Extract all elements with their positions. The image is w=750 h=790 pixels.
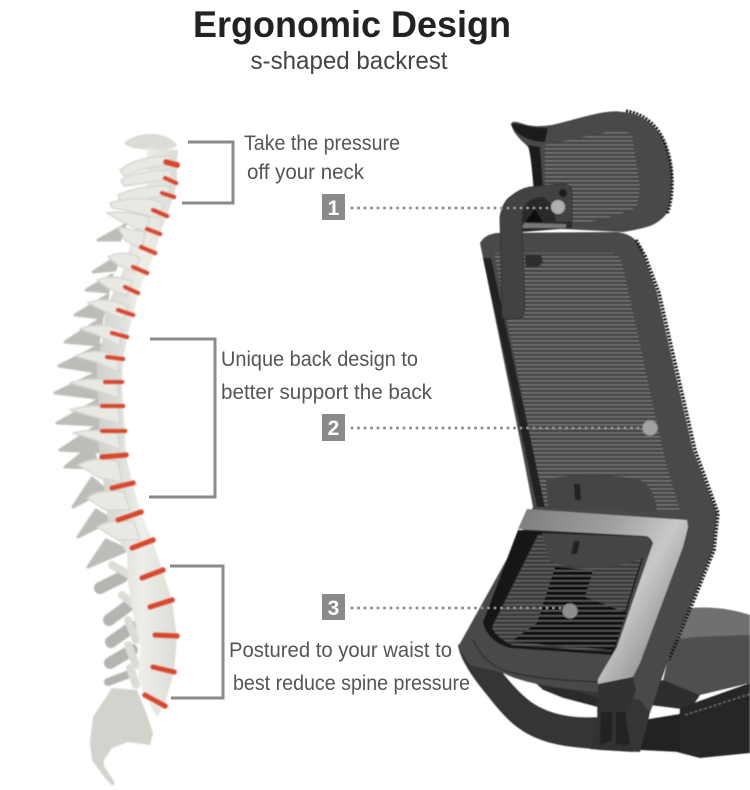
office chair [458,111,750,758]
transverse plates [70,156,172,540]
mechanism highlight [685,694,750,715]
seat underside [650,680,700,710]
center connector [590,677,636,752]
seat top [664,607,750,642]
bracket: neck [182,142,233,203]
lumbar knobs [112,565,138,685]
backrest edge mesh [636,240,718,660]
label: back [221,348,432,404]
label: back: Unique back design to [221,348,418,371]
headrest [511,111,672,232]
lower strut [533,681,597,707]
backrest frame [458,232,717,713]
label: waist [229,639,470,695]
base mechanism [677,683,750,758]
tilt bracket [640,714,680,752]
lumbar dark mesh [510,567,627,650]
arm hole backing [522,190,572,232]
spine illustration [55,134,178,786]
subtitle: s-shaped backrest [250,47,448,75]
number badge 3 [322,594,345,620]
hoop opening [503,673,597,717]
lumbar pad upper [546,476,657,512]
silver accent bar [518,509,688,684]
label: back: better support the back [221,381,432,404]
atlas vertebra [124,134,177,150]
label: neck: off your neck [247,161,364,184]
leader line 1 [352,200,565,214]
headrest mesh [545,131,640,226]
label: waist: Postured to your waist to [229,639,452,662]
sacrum [90,688,153,786]
spinous process spikes [55,225,128,567]
bottom hoop frame [458,630,668,752]
lumbar pad lower [542,533,653,567]
label: neck [244,132,400,184]
number badge 2: 2 [328,417,339,440]
lower panel opening [483,530,650,655]
number badge 1: 1 [328,197,340,220]
number badge 3: 3 [328,597,339,620]
headrest rim mesh [626,111,672,214]
backrest upper mesh [494,253,680,510]
vertebral column [97,148,178,717]
headrest arm [500,184,572,319]
lower mesh [492,535,648,652]
collar clip [525,255,543,267]
intervertebral discs [102,162,177,706]
bracket: back [149,339,215,497]
bracket: waist [170,566,223,698]
arm pivot [559,189,567,197]
seat fabric [663,635,750,695]
label: neck: Take the pressure [244,132,400,155]
lumbar lobes [100,577,132,682]
leader line 2 [352,420,658,436]
number badge 1 [322,194,345,220]
title: Ergonomic Design [193,4,511,45]
headrest left edge [528,145,546,228]
panel bottom crease [473,640,597,682]
left frame shadow [483,258,545,507]
label: waist: best reduce spine pressure [233,672,470,695]
leader line 3 [352,604,578,618]
number badge 2 [322,414,345,441]
